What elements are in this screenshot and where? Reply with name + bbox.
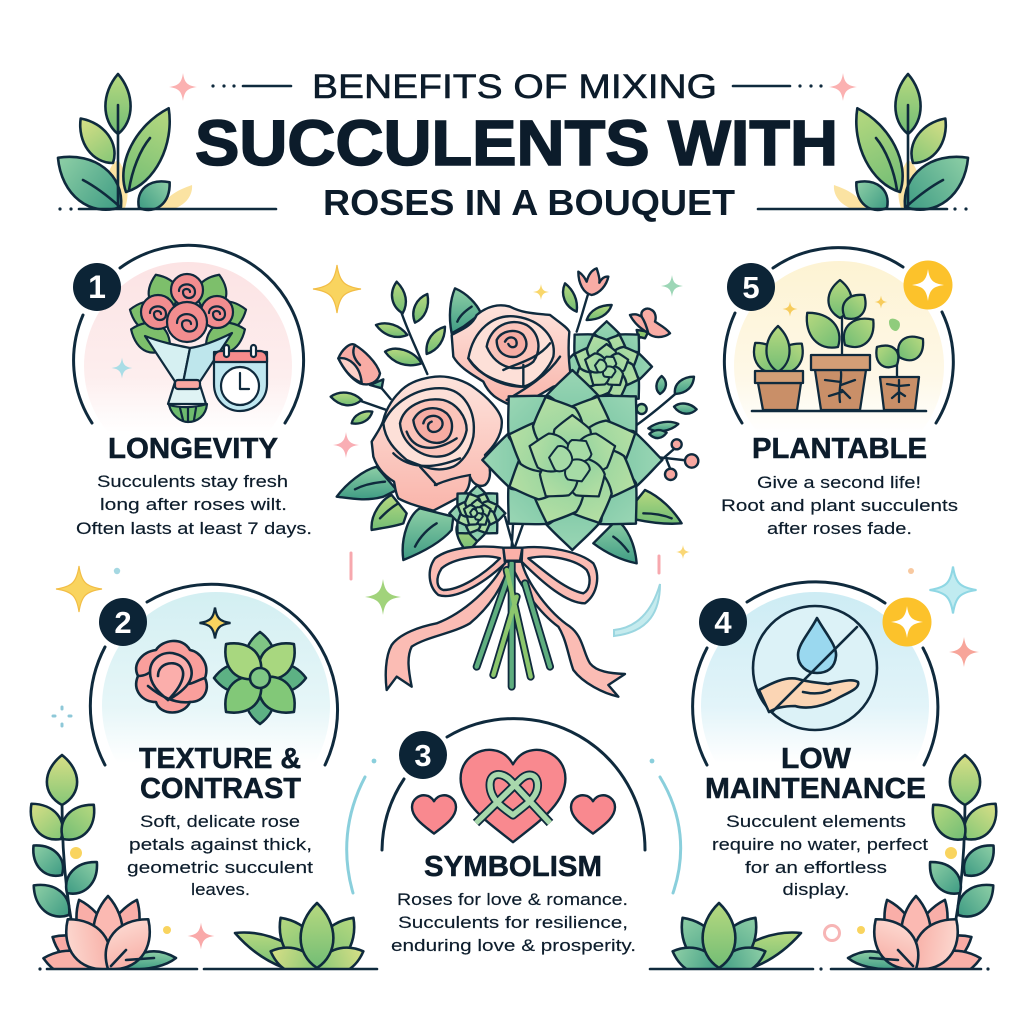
panel 4: low maintenance xyxy=(693,566,979,899)
panel 1: longevity xyxy=(73,245,312,538)
icon: hearts with knot xyxy=(412,750,615,842)
panel 2 ring xyxy=(90,584,338,765)
body text: Give a second life! xyxy=(757,473,921,492)
badge 3 xyxy=(399,731,447,779)
body text xyxy=(712,812,928,899)
badge 1 xyxy=(73,263,121,311)
large foliage leaves xyxy=(337,288,682,563)
left sprig xyxy=(21,755,105,925)
body text: Roses for love & romance. xyxy=(397,890,628,909)
small sparkles xyxy=(782,296,900,331)
central illustration: bouquet xyxy=(331,268,698,697)
heading: MAINTENANCE xyxy=(705,773,926,805)
panel 2: texture and contrast xyxy=(90,584,338,899)
upper right succulent xyxy=(561,321,652,412)
right sprig and berries xyxy=(637,376,698,480)
body text xyxy=(127,812,313,899)
top right sprig and blossoms xyxy=(563,268,670,350)
panel 1 background disc xyxy=(84,262,292,470)
panel 1 ring xyxy=(74,245,304,423)
icon: succulent rosette xyxy=(214,632,306,724)
right small heart xyxy=(571,795,615,834)
right lotus xyxy=(848,894,983,986)
icon: rose bouquet with calendar xyxy=(125,269,267,422)
bottom left plants xyxy=(21,755,377,986)
sparkles xyxy=(908,566,979,667)
body text: enduring love & prosperity. xyxy=(391,936,636,955)
header decoration: top left plant xyxy=(45,74,276,223)
panel 4 background disc xyxy=(701,592,929,820)
heading: TEXTURE & xyxy=(139,743,301,775)
body text: petals against thick, xyxy=(129,835,312,854)
badge 2: 2 xyxy=(114,605,132,640)
badge 4 xyxy=(699,598,747,646)
left sprig xyxy=(331,282,445,424)
small star xyxy=(200,608,230,638)
heading xyxy=(139,743,301,805)
body text: after roses fade. xyxy=(767,519,912,538)
title: BENEFITS OF MIXING xyxy=(312,68,717,106)
left small heart xyxy=(412,795,456,834)
panel 3: symbolism xyxy=(347,719,681,955)
heading: SYMBOLISM xyxy=(424,851,602,883)
small succulent xyxy=(449,485,505,541)
rose bud xyxy=(338,344,380,384)
body text: Root and plant succulents xyxy=(721,496,958,515)
body text: geometric succulent xyxy=(127,858,313,877)
header decoration: top right plant xyxy=(758,74,981,223)
heading: LONGEVITY xyxy=(108,433,278,465)
panel 2 background disc xyxy=(102,592,330,820)
body text: Often lasts at least 7 days. xyxy=(76,519,312,538)
panel 4 ring xyxy=(693,582,938,765)
bottom right plants xyxy=(650,755,1006,986)
heading: CONTRAST xyxy=(140,773,301,805)
right low succulent xyxy=(668,903,801,981)
body text: Succulents for resilience, xyxy=(398,913,628,932)
body text xyxy=(76,472,312,538)
body text: require no water, perfect xyxy=(712,835,928,854)
title xyxy=(195,68,838,223)
top rose xyxy=(452,305,571,405)
body text xyxy=(721,473,958,538)
big succulent xyxy=(482,370,662,550)
body text: for an effortless xyxy=(745,858,887,877)
panel 5: plantable xyxy=(721,248,958,538)
left low succulent xyxy=(235,903,368,981)
title: SUCCULENTS WITH xyxy=(195,107,838,179)
heading: PLANTABLE xyxy=(752,433,927,465)
bouquet stems xyxy=(477,563,550,687)
body text xyxy=(391,890,636,955)
ribbon tails xyxy=(386,562,625,697)
ribbon bow xyxy=(430,547,597,603)
badge 4: 4 xyxy=(714,605,732,640)
badge 2 xyxy=(99,598,147,646)
icon: rose bloom xyxy=(136,641,207,712)
panel 5 background disc xyxy=(734,261,944,471)
body text: long after roses wilt. xyxy=(100,495,287,514)
star badge xyxy=(882,598,932,646)
heading xyxy=(705,743,926,805)
body text: display. xyxy=(782,880,850,899)
panel 3 ring xyxy=(382,719,645,850)
big heart xyxy=(461,750,565,842)
body text: Succulents stay fresh xyxy=(97,472,288,491)
cyan side arcs xyxy=(347,759,681,893)
side sparkles left xyxy=(53,566,120,726)
star badge xyxy=(904,260,952,310)
badge 5: 5 xyxy=(742,270,760,305)
icon: no water over hand xyxy=(753,606,877,730)
left rose xyxy=(372,376,502,511)
body text: Succulent elements xyxy=(726,812,906,831)
title: ROSES IN A BOUQUET xyxy=(323,182,735,223)
small star xyxy=(112,358,132,378)
badge 3: 3 xyxy=(414,738,432,773)
icon: three potted plants xyxy=(746,280,930,411)
panel 5 ring xyxy=(724,248,953,423)
right sprig xyxy=(922,755,1006,925)
left lotus xyxy=(41,894,176,986)
body text: leaves. xyxy=(191,880,250,899)
green knot xyxy=(476,775,550,823)
header accents xyxy=(169,73,857,101)
heading: LOW xyxy=(781,743,852,775)
badge 1: 1 xyxy=(88,269,106,305)
stems above bow xyxy=(505,517,523,547)
sparkles around bouquet xyxy=(313,265,690,636)
body text: Soft, delicate rose xyxy=(140,812,300,831)
badge 5 xyxy=(727,263,775,311)
